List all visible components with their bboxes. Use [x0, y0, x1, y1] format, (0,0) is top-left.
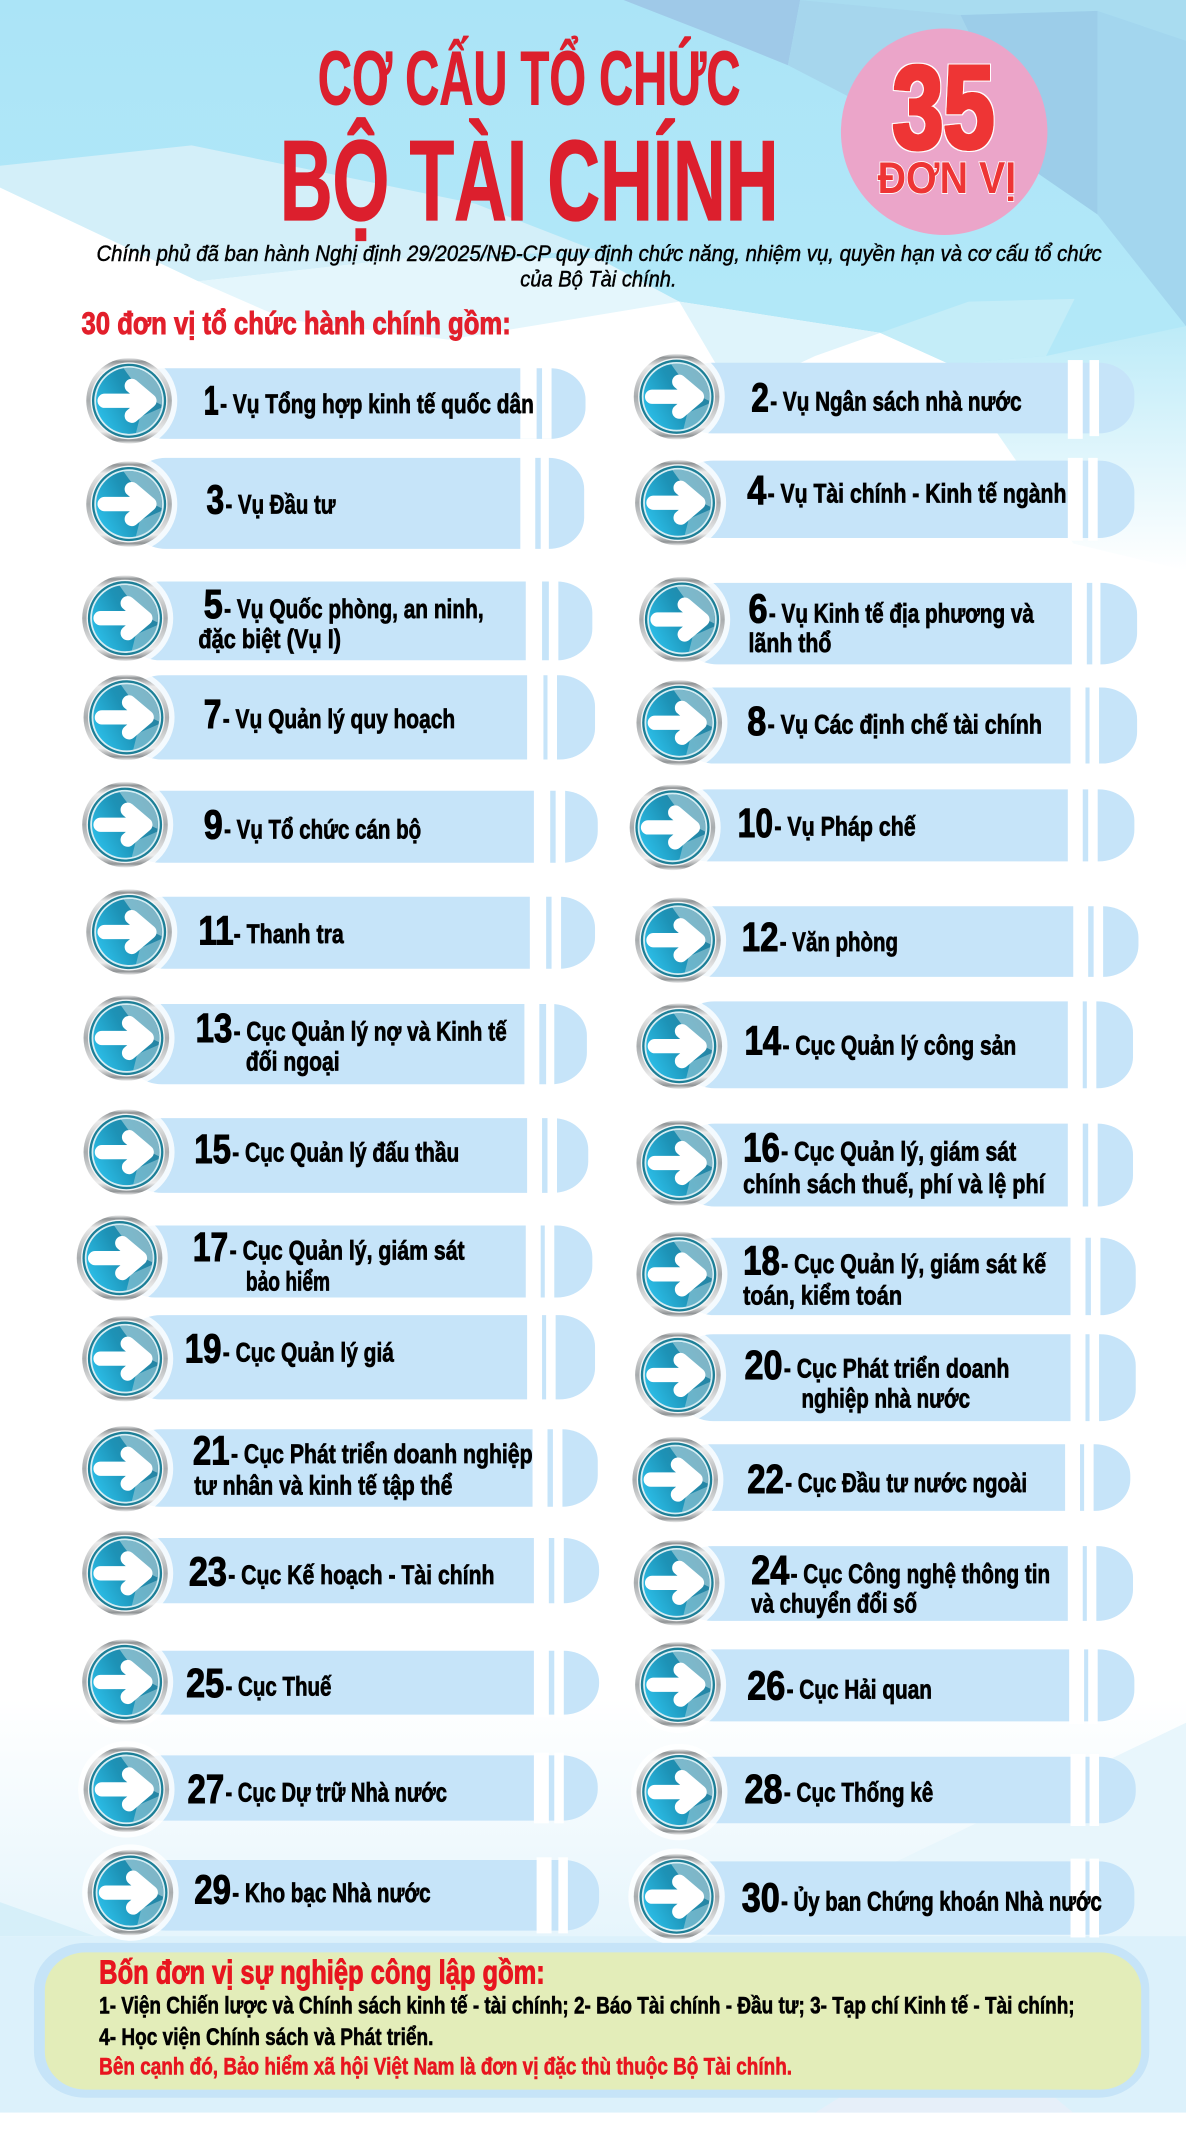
item 6: [634, 571, 1137, 668]
item 16: 16: [743, 1125, 780, 1171]
item 17: bảo hiểm: [246, 1266, 330, 1297]
item 18: [631, 1226, 1136, 1323]
item 7: 7: [204, 691, 221, 737]
item 24: [628, 1535, 1133, 1631]
item 1: 1: [204, 377, 219, 423]
panel: public service units: Bốn đơn vị sự nghiệp công lập gồm:: [99, 1955, 545, 1992]
item 22: - Cục Đầu tư nước ngoài: [785, 1467, 1027, 1498]
item 28: - Cục Thống kê: [784, 1777, 933, 1808]
item 11: [81, 884, 595, 980]
item 14: [631, 998, 1133, 1094]
item 29: 29: [194, 1866, 231, 1912]
item 21: [77, 1420, 598, 1517]
item 4: - Vụ Tài chính - Kinh tế ngành: [768, 478, 1066, 509]
item 8: - Vụ Các định chế tài chính: [768, 709, 1042, 740]
item 4: [630, 454, 1134, 551]
item 27: [78, 1741, 598, 1838]
section heading: 30 đơn vị tổ chức hành chính gồm:: [82, 306, 511, 341]
item 26: 26: [747, 1663, 785, 1709]
item 24: và chuyển đổi số: [751, 1588, 917, 1619]
item 3: [81, 455, 584, 552]
item 12: - Văn phòng: [780, 926, 898, 957]
item 10: [624, 779, 1134, 876]
item 2: [628, 348, 1134, 445]
intro text: của Bộ Tài chính.: [520, 267, 677, 292]
title: BỘ TÀI CHÍNH: [280, 117, 778, 245]
item 9: [77, 776, 598, 873]
item 17: - Cục Quản lý, giám sát: [230, 1234, 465, 1265]
item 20: 20: [744, 1342, 783, 1388]
item 22: 22: [747, 1456, 784, 1502]
item 21: tư nhân và kinh tế tập thể: [194, 1470, 452, 1501]
item 27: - Cục Dự trữ Nhà nước: [226, 1777, 447, 1808]
title: [280, 37, 778, 245]
item 22: [627, 1431, 1130, 1528]
item 16: chính sách thuế, phí và lệ phí: [743, 1168, 1046, 1199]
item 25: [77, 1634, 599, 1730]
item 3: - Vụ Đầu tư: [226, 489, 336, 520]
item 2: 2: [751, 375, 769, 421]
item 28: 28: [744, 1766, 783, 1812]
item 12: [630, 892, 1138, 988]
item 24: 24: [751, 1547, 790, 1593]
item 15: - Cục Quản lý đấu thầu: [232, 1137, 459, 1168]
item 12: 12: [742, 914, 778, 960]
item 1: - Vụ Tổng hợp kinh tế quốc dân: [220, 388, 534, 419]
badge: 35 đơn vị: [841, 29, 1047, 235]
item 25: - Cục Thuế: [226, 1671, 332, 1702]
item 10: 10: [738, 800, 773, 846]
item 28: [631, 1744, 1136, 1840]
item 23: [77, 1525, 599, 1622]
badge: 35 đơn vị: ĐƠN VỊ: [878, 152, 1016, 203]
item 15: 15: [194, 1126, 231, 1172]
item 20: - Cục Phát triển doanh: [784, 1353, 1009, 1384]
item 17: [71, 1210, 592, 1306]
item 30: [628, 1848, 1134, 1945]
item 18: 18: [743, 1237, 780, 1283]
item 14: 14: [744, 1017, 781, 1063]
item 13: - Cục Quản lý nợ và Kinh tế: [234, 1016, 507, 1047]
item 21: - Cục Phát triển doanh nghiệp: [231, 1438, 533, 1469]
panel: public service units: Bên cạnh đó, Bảo hiểm xã hội Việt Nam là đơn vị đặc thù thuộc Bộ Tài chính.: [99, 2054, 792, 2081]
item 29: [82, 1844, 599, 1941]
item 11: 11: [198, 907, 234, 953]
item 1: [81, 353, 586, 449]
intro text: Chính phủ đã ban hành Nghị định 29/2025/NĐ-CP quy định chức năng, nhiệm vụ, quyền hạn và cơ cấu tổ chức: [96, 241, 1102, 266]
item 5: [77, 570, 592, 666]
item 14: - Cục Quản lý công sản: [783, 1029, 1016, 1060]
item 30: 30: [742, 1875, 780, 1921]
item 23: - Cục Kế hoạch - Tài chính: [228, 1559, 495, 1590]
item 8: [631, 675, 1137, 771]
badge: 35 đơn vị: 35: [893, 42, 994, 174]
item 5: - Vụ Quốc phòng, an ninh,: [224, 593, 484, 624]
item 13: [78, 990, 587, 1087]
item 17: 17: [193, 1224, 228, 1270]
panel: public service units: [34, 1943, 1149, 2098]
item 27: 27: [187, 1766, 224, 1812]
item 15: [78, 1104, 588, 1200]
item 16: - Cục Quản lý, giám sát: [781, 1135, 1016, 1166]
item 5: đặc biệt (Vụ I): [198, 623, 341, 654]
item 19: [77, 1310, 595, 1407]
item 3: 3: [206, 477, 224, 523]
item 19: 19: [185, 1326, 221, 1372]
item 7: - Vụ Quản lý quy hoạch: [223, 703, 455, 734]
item 2: - Vụ Ngân sách nhà nước: [770, 385, 1022, 416]
item 21: 21: [193, 1428, 230, 1474]
item 24: - Cục Công nghệ thông tin: [791, 1558, 1050, 1589]
item 20: nghiệp nhà nước: [802, 1383, 970, 1414]
item 8: 8: [747, 698, 766, 744]
panel: public service units: 4- Học viện Chính sách và Phát triển.: [99, 2024, 433, 2051]
item 20: [630, 1327, 1136, 1424]
item 11: - Thanh tra: [234, 918, 344, 949]
item 9: 9: [204, 801, 223, 847]
item 26: [630, 1636, 1134, 1733]
item 29: - Kho bạc Nhà nước: [232, 1877, 431, 1908]
item 6: - Vụ Kinh tế địa phương và: [769, 597, 1035, 628]
item 25: 25: [186, 1660, 224, 1706]
item 19: - Cục Quản lý giá: [223, 1336, 395, 1367]
item 23: 23: [189, 1549, 227, 1595]
intro text: [96, 241, 1102, 292]
item 18: - Cục Quản lý, giám sát kế: [781, 1248, 1047, 1279]
item 26: - Cục Hải quan: [787, 1673, 932, 1704]
item 16: [631, 1115, 1133, 1211]
item 13: đối ngoại: [246, 1046, 340, 1077]
item 6: 6: [749, 585, 768, 631]
item 18: toán, kiểm toán: [743, 1279, 902, 1310]
item 4: 4: [747, 467, 766, 513]
item 13: 13: [196, 1005, 232, 1051]
item 10: - Vụ Pháp chế: [774, 811, 916, 842]
item 7: [78, 669, 595, 766]
item 5: 5: [204, 581, 223, 627]
title: CƠ CẤU TỔ CHỨC: [318, 37, 740, 122]
item 6: lãnh thổ: [749, 627, 831, 658]
item 9: - Vụ Tổ chức cán bộ: [224, 813, 421, 844]
